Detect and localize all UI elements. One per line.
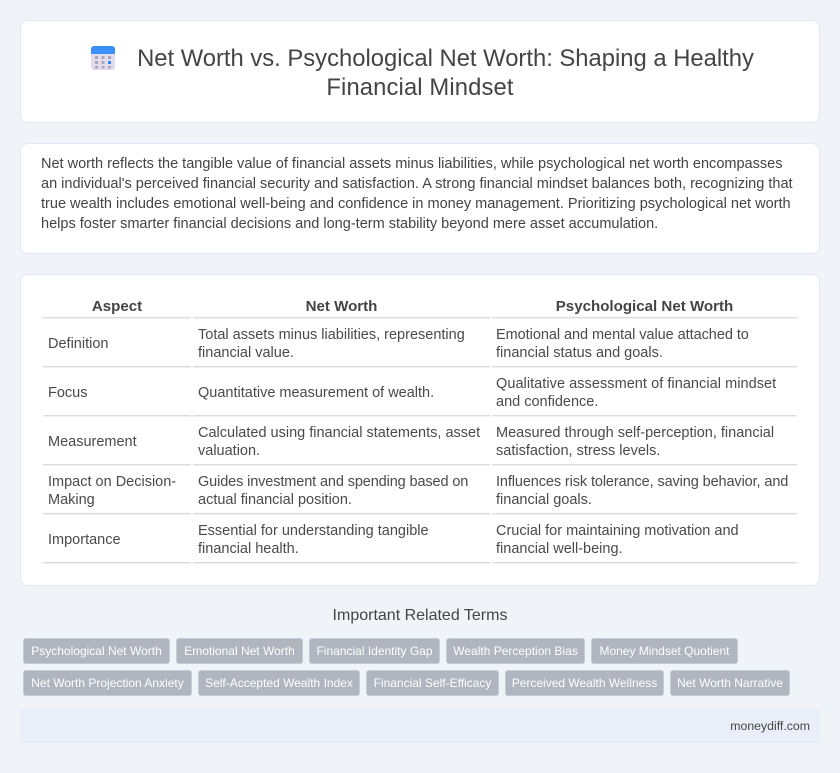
cell: Net Worth impact: actual financial position.: [198, 492, 352, 508]
cell: Net Worth measurement: Calculated using financial statements, asset: [198, 425, 480, 441]
tag: Money Mindset Quotient: [599, 644, 730, 658]
cell: Psychological definition: [496, 327, 749, 361]
heading: Important Related Terms: Important Related Terms: [333, 607, 507, 624]
row: Importance: Importance: [48, 532, 121, 548]
tag: [23, 638, 170, 664]
cell: Net Worth definition: [198, 327, 465, 361]
cell: Net Worth definition: Total assets minus liabilities, representing: [198, 327, 465, 343]
title: Net Worth vs. Psychological Net Worth: Shaping a Healthy: [137, 45, 754, 72]
cell: Net Worth importance: [198, 523, 429, 557]
text block: description: Net worth reflects the tangible value of financial assets minus liabilities, while psychological net worth encompasses: [41, 156, 782, 172]
table header: Aspect: Aspect: [92, 298, 142, 315]
cell: Net Worth impact: [198, 474, 468, 508]
tag: [366, 670, 499, 696]
tag: Perceived Wealth Wellness: [512, 676, 657, 690]
tag: [670, 670, 790, 696]
cell: Psychological definition: financial status and goals.: [496, 345, 663, 361]
tag: [309, 638, 440, 664]
row: Impact on Decision-Making: Impact on Decision-: [48, 474, 176, 490]
tag: [591, 638, 738, 664]
icon: calendar: [91, 46, 115, 70]
title: [137, 45, 754, 101]
tag: Self-Accepted Wealth Index: [205, 676, 353, 690]
row: Impact on Decision-Making: Making: [48, 492, 95, 508]
tag: [23, 670, 192, 696]
footer text: moneydiff.com: moneydiff.com: [730, 719, 810, 733]
cell: Psychological impact: financial goals.: [496, 492, 592, 508]
title: Financial Mindset: [326, 74, 514, 101]
panel: header: [20, 20, 820, 123]
table header: Net Worth: Net Worth: [306, 298, 377, 315]
cell: Psychological importance: [496, 523, 739, 557]
cell: Net Worth definition: financial value.: [198, 345, 294, 361]
tag: Financial Identity Gap: [316, 644, 433, 658]
cell: Net Worth focus: Quantitative measurement of wealth.: [198, 385, 434, 401]
panel: description: [20, 143, 820, 254]
cell: Psychological definition: Emotional and mental value attached to: [496, 327, 749, 343]
tag: [446, 638, 585, 664]
cell: Net Worth importance: financial health.: [198, 541, 299, 557]
row: Impact on Decision-Making: [48, 474, 176, 508]
tag: Psychological Net Worth: [31, 644, 162, 658]
cell: Psychological impact: Influences risk tolerance, saving behavior, and: [496, 474, 788, 490]
tag: Net Worth Projection Anxiety: [31, 676, 184, 690]
cell: Psychological focus: Qualitative assessment of financial mindset: [496, 376, 776, 392]
text block: description: [41, 156, 793, 232]
footer bar: [20, 709, 820, 743]
tag: [198, 670, 360, 696]
cell: Net Worth importance: Essential for understanding tangible: [198, 523, 429, 539]
cell: Psychological measurement: satisfaction, stress levels.: [496, 443, 660, 459]
cell: Psychological importance: Crucial for maintaining motivation and: [496, 523, 739, 539]
cell: Psychological measurement: Measured through self-perception, financial: [496, 425, 774, 441]
tag: Wealth Perception Bias: [453, 644, 578, 658]
tag: Net Worth Narrative: [677, 676, 783, 690]
cell: Psychological focus: and confidence.: [496, 394, 598, 410]
tags: related terms: [23, 638, 790, 696]
cell: Psychological impact: [496, 474, 788, 508]
tag: [505, 670, 664, 696]
row: Measurement: Measurement: [48, 434, 137, 450]
cell: Net Worth measurement: [198, 425, 480, 459]
tag: Financial Self-Efficacy: [374, 676, 491, 690]
cell: Net Worth impact: Guides investment and spending based on: [198, 474, 468, 490]
panel: comparison table: [20, 274, 820, 586]
row: Definition: Definition: [48, 336, 108, 352]
tag: [176, 638, 303, 664]
text block: description: an individual's perceived financial security and satisfaction. A strong financial mindset balances both, recognizing that: [41, 176, 793, 192]
cell: Psychological measurement: [496, 425, 774, 459]
cell: Psychological importance: financial well-being.: [496, 541, 623, 557]
cell: Net Worth measurement: valuation.: [198, 443, 260, 459]
cell: Psychological focus: [496, 376, 776, 410]
table header: Psychological Net Worth: Psychological Net Worth: [556, 298, 733, 315]
row: Focus: Focus: [48, 385, 88, 401]
text block: description: helps foster smarter financial decisions and long-term stability beyond mere asset accumulation.: [41, 216, 658, 232]
tag: Emotional Net Worth: [184, 644, 295, 658]
text block: description: true wealth includes emotional well-being and confidence in money management. Prioritizing psychological net worth: [41, 196, 791, 212]
